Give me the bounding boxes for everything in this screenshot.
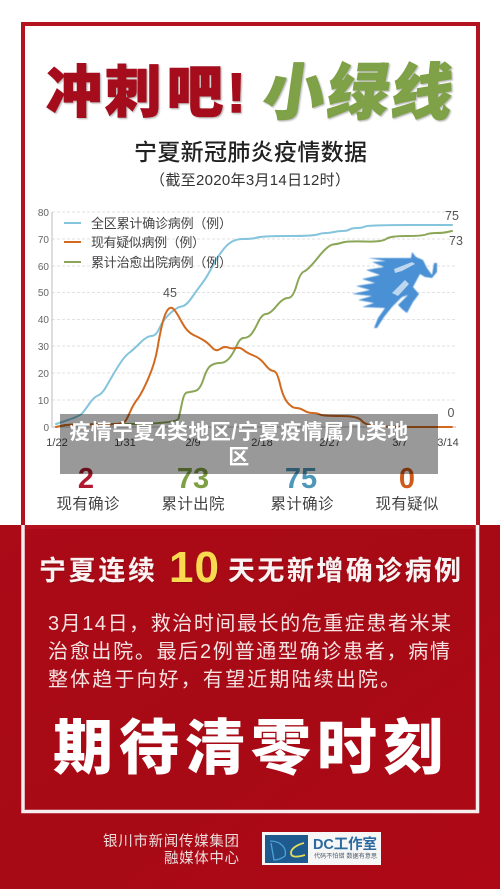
line: cumulative confirmed [56,225,452,424]
y axis labels: 60 [38,262,49,273]
x axis labels: 2/27 [319,437,341,449]
stat: cumulative confirmed: 累计确诊 [270,495,334,513]
x axis labels [46,437,459,449]
slogan: 期待清零时刻 [53,715,443,782]
y axis labels [38,208,49,434]
title [46,59,458,127]
legend [64,216,232,270]
legend: confirmed: 全区累计确诊病例（例） [91,216,232,231]
panel: top frame [23,24,478,527]
stat: current confirmed: 2 [78,463,94,495]
heading: ten days without new cases: 宁夏连续 [39,556,155,586]
title: red part: 吧 [167,61,223,124]
body text: 3月14日，救治时间最长的危重症患者米某 [48,612,451,635]
stat: cumulative discharged [162,463,224,513]
heading: ten days without new cases [39,543,461,592]
caption banner [60,414,438,474]
heading: ten days without new cases: 天无新增确诊病例 [228,556,461,586]
stat: current confirmed [56,463,120,513]
stat: current suspected: 现有疑似 [376,495,438,513]
footer organisation [103,833,239,867]
title: green part: 小 [259,59,330,127]
axes [52,212,456,427]
x axis labels: 1/22 [46,437,68,449]
panel: red lower background [0,525,500,889]
line: green cumulative recovered [56,231,452,427]
icon: blue running figure [352,252,437,328]
x axis labels: 2/18 [251,437,273,449]
y axis labels: 30 [38,342,49,353]
logo mark [270,841,285,860]
footer organisation: 融媒体中心 [164,850,239,867]
title: green part: 绿 [323,59,394,127]
data labels: 0 [448,406,455,420]
heading: ten days without new cases: 10 [169,543,219,592]
data labels [163,209,463,420]
y axis labels: 70 [38,235,49,246]
stat: cumulative discharged: 73 [177,463,209,495]
y axis labels: 50 [38,288,49,299]
line chart [38,208,463,449]
y axis labels: 80 [38,208,49,219]
data labels: 45 [163,286,177,300]
title: red part: ! [227,61,246,124]
stat: cumulative discharged: 累计出院 [162,494,224,513]
caption banner: 疫情宁夏4类地区/宁夏疫情属几类地 [69,421,409,444]
x axis labels: 2/9 [185,437,201,449]
body text: 治愈出院。最后2例普通型确诊患者，病情 [48,640,450,663]
legend: recovered: 累计治愈出院病例（例） [91,255,232,270]
title: red part: 刺 [105,61,161,124]
date note: （截至2020年3月14日12时） [150,172,350,189]
title: red part [46,61,246,124]
body text [48,612,451,691]
data labels: 73 [449,234,463,248]
title: green part: 线 [387,59,458,127]
caption banner: 区 [228,446,250,469]
stat: current suspected [376,463,438,513]
y axis labels: 20 [38,369,49,380]
x axis labels: 3/7 [392,437,408,449]
logo name: DC工作室 [313,835,377,853]
grid lines [52,212,455,400]
subtitle: 宁夏新冠肺炎疫情数据 [134,139,367,165]
data labels: 75 [445,209,459,223]
y axis labels: 10 [38,396,49,407]
title: green part [259,59,458,127]
x axis labels: 3/14 [437,437,459,449]
stat: current confirmed: 现有确诊 [56,495,120,513]
stat: cumulative confirmed [270,463,334,513]
logo: DC studio [262,832,381,865]
title: red part: 冲 [46,61,102,124]
body text: 整体趋于向好，有望近期陆续出院。 [48,668,400,691]
y axis labels: 0 [43,423,49,434]
stat: cumulative confirmed: 75 [285,463,317,495]
stat: current suspected: 0 [399,463,415,495]
legend: suspected: 现有疑似病例（例） [91,235,205,250]
y axis labels: 40 [38,315,49,326]
footer organisation: 银川市新闻传媒集团 [103,833,239,850]
stats row [56,463,438,513]
x axis labels: 1/31 [114,437,136,449]
logo tagline: 代码不怕错 数据有意思 [314,852,377,860]
panel: lower white frame [23,525,478,812]
line: orange suspected [56,308,452,427]
